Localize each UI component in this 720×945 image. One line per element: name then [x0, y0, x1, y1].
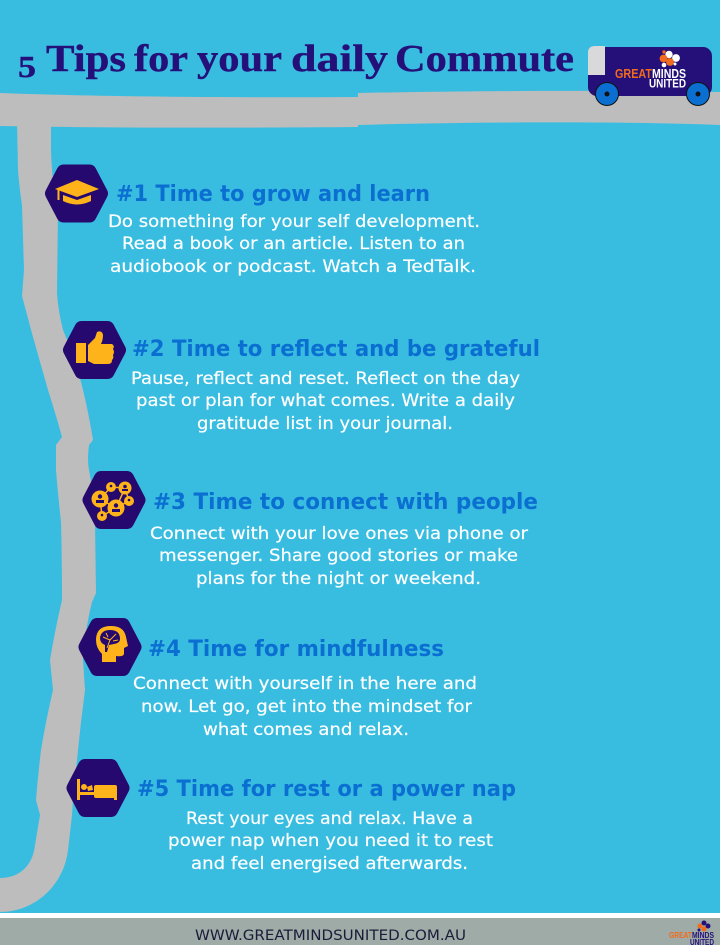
logo wordmark: MINDS — [652, 67, 686, 81]
text 2: past or plan for what comes. Write a daily — [136, 391, 515, 411]
heading 3: #3 Time to connect with people — [153, 489, 538, 515]
text 1: Read a book or an article. Listen to an — [122, 234, 465, 254]
text 3: plans for the night or weekend. — [196, 569, 481, 589]
text 3: messenger. Share good stories or make — [159, 546, 518, 566]
text 4: what comes and relax. — [203, 720, 409, 740]
tip 3 — [90, 478, 538, 589]
text 1 — [108, 212, 480, 277]
text 3 — [150, 524, 528, 589]
text 4 — [133, 674, 477, 740]
heading 4: #4 Time for mindfulness — [148, 636, 444, 662]
heading 1: #1 Time to grow and learn — [116, 181, 430, 207]
title: daily — [291, 38, 388, 80]
heading 5: #5 Time for rest or a power nap — [137, 776, 516, 802]
title: your — [197, 38, 282, 80]
logo wordmark: GREAT — [615, 67, 652, 81]
icon: bed — [74, 766, 122, 810]
text 5: Rest your eyes and relax. Have a — [186, 809, 473, 829]
footer logo: MINDS — [692, 931, 715, 940]
bus wheel right — [686, 82, 710, 106]
text 4: now. Let go, get into the mindset for — [141, 697, 472, 717]
footer logo — [669, 920, 715, 945]
text 3: Connect with your love ones via phone or — [150, 524, 528, 544]
icon: graduation cap — [52, 172, 101, 216]
bus wheel left — [596, 82, 618, 106]
tip 4 — [86, 625, 477, 740]
icon: people network — [90, 478, 138, 522]
tip 2 — [70, 328, 540, 434]
icon: thumbs up — [70, 328, 119, 372]
text 2: gratitude list in your journal. — [197, 414, 453, 434]
heading 2: #2 Time to reflect and be grateful — [132, 336, 540, 362]
text 5: power nap when you need it to rest — [168, 831, 493, 851]
text 5 — [168, 809, 493, 874]
text 1: Do something for your self development. — [108, 212, 480, 232]
footer — [0, 913, 720, 945]
bus with logo — [588, 46, 712, 106]
icon: head with brain — [86, 625, 134, 669]
text 5: and feel energised afterwards. — [191, 854, 468, 874]
text 2: Pause, reflect and reset. Reflect on the day — [131, 369, 520, 389]
tip 5 — [74, 766, 516, 874]
bus window — [588, 46, 605, 75]
title: 5 — [18, 49, 36, 84]
logo wordmark — [615, 67, 686, 90]
text 4: Connect with yourself in the here and — [133, 674, 477, 694]
tip 1 — [52, 172, 480, 277]
text 1: audiobook or podcast. Watch a TedTalk. — [110, 257, 476, 277]
title — [18, 38, 574, 84]
footer logo: GREAT — [669, 931, 692, 940]
title: Tips — [46, 38, 126, 80]
logo wordmark: UNITED — [649, 76, 686, 90]
website url: WWW.GREATMINDSUNITED.COM.AU — [195, 928, 466, 944]
logo circles — [660, 50, 680, 67]
text 2 — [131, 369, 520, 434]
title: for — [134, 38, 188, 80]
title: Commute — [395, 38, 574, 80]
